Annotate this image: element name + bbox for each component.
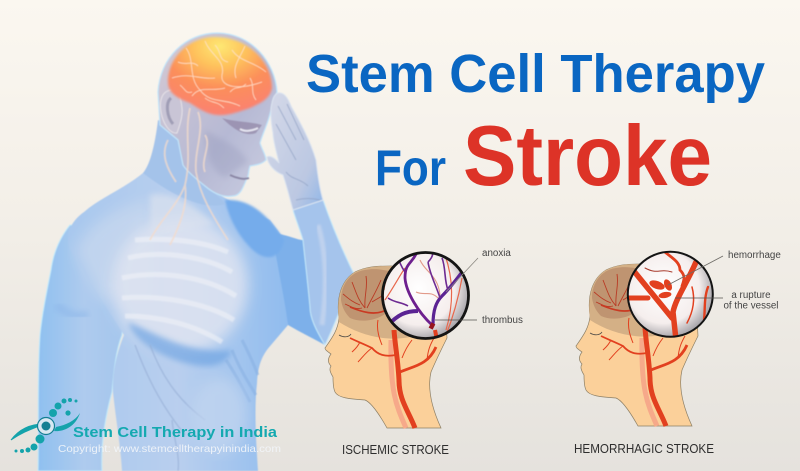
callout: a rupture of the vessel: of the vessel [723,300,779,312]
torso [68,147,288,471]
title: For: For [375,140,446,196]
ribs [122,239,236,342]
shoulder light [75,200,152,300]
belly light [192,377,248,453]
diagram: ischemic stroke head [325,248,523,457]
brow and eye [222,118,262,134]
callout: thrombus: thrombus [482,315,523,326]
logo text: Stem Cell Therapy in India [73,425,278,441]
left arm [38,225,130,471]
callout: anoxia [446,248,511,292]
neck [143,120,226,206]
nerves [150,108,228,245]
callout: hemorrhage [668,250,781,285]
icon: stem cell logo [11,398,80,453]
neck light [150,194,215,235]
label: hemorrhagic stroke: HEMORRHAGIC STROKE [574,441,714,456]
title: Stem Cell Therapy: Stem Cell Therapy [306,44,765,104]
illustration: human figure with glowing brain [38,33,355,471]
shadow under ribs [128,322,232,366]
upper right arm [272,232,325,345]
logo watermark [11,398,281,455]
lower rib lines [226,340,258,402]
hand [267,93,323,210]
diagram: hemorrhagic stroke head [574,250,781,456]
callout: a rupture of the vessel [675,290,779,312]
chest highlight [112,217,248,353]
title: Stroke: Stroke [463,109,712,204]
mouth [230,175,249,179]
ear [160,90,182,133]
callout: hemorrhage: hemorrhage [728,250,781,261]
shoulder behind the neck [225,200,284,257]
callout: anoxia: anoxia [482,248,511,259]
magnifier lens: hemorrhage [625,252,713,340]
label: ischemic stroke: ISCHEMIC STROKE [342,442,449,457]
forearm [293,200,355,345]
brain [168,37,272,115]
callout: thrombus [435,315,523,326]
callout: a rupture of the vessel: a rupture [731,290,771,301]
finger lines [276,104,320,200]
shadow on arm [56,305,88,316]
magnifier lens: anoxia [382,250,468,340]
copyright text: Copyright: www.stemcelltherapyinindia.com [58,443,281,455]
skull [158,33,277,196]
face shade [205,130,248,178]
